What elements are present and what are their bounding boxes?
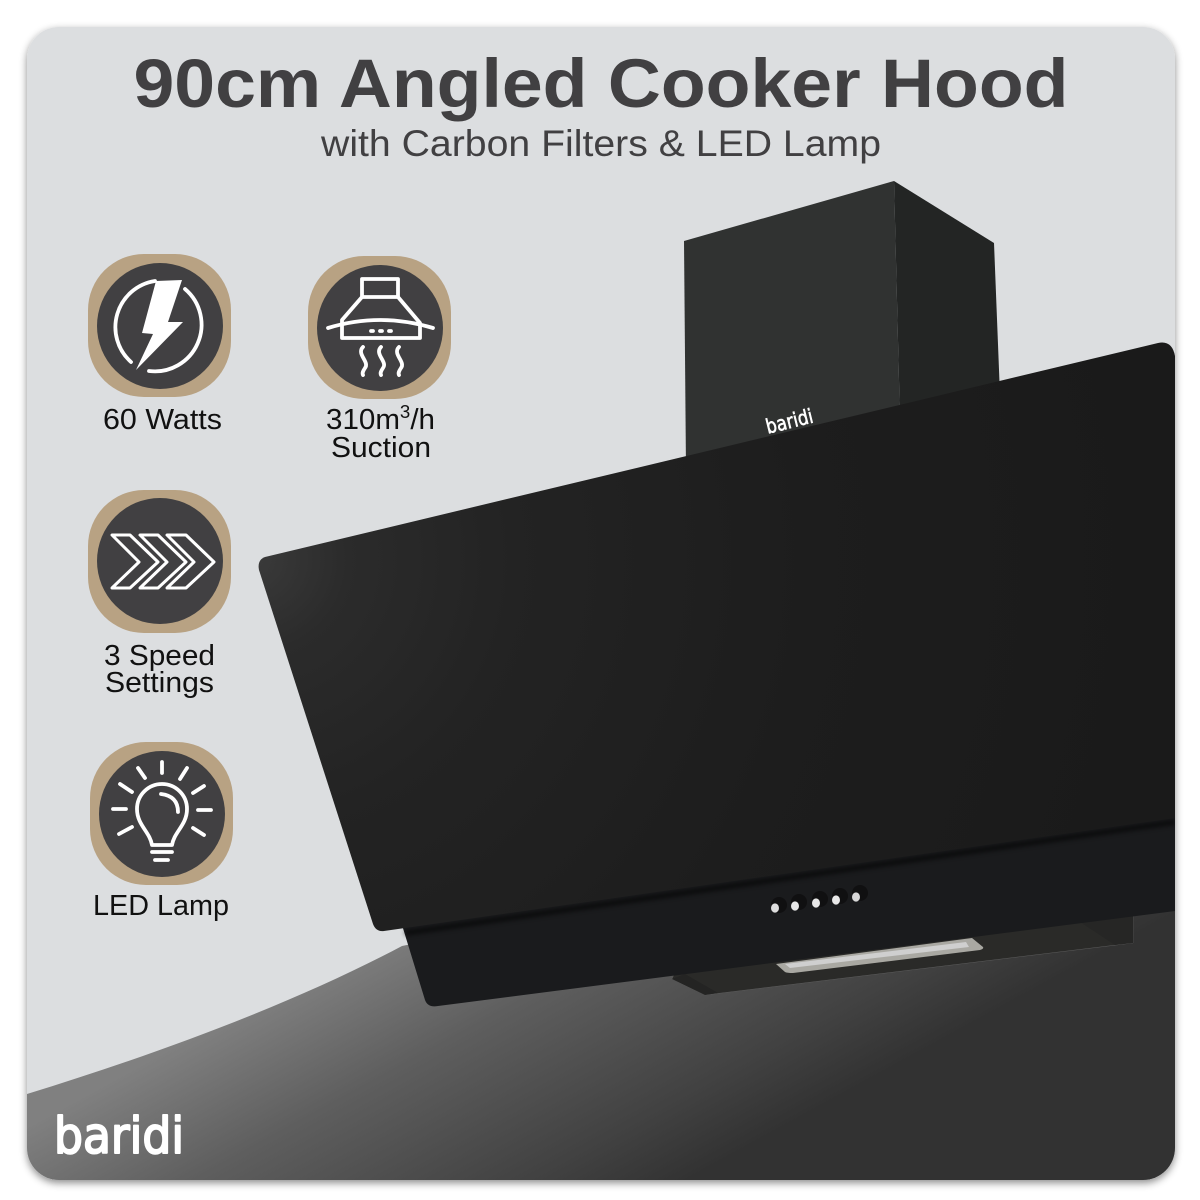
label: LED Lamp xyxy=(93,890,229,922)
feature: speed settings xyxy=(88,490,231,699)
label line 2: Suction xyxy=(331,432,431,464)
lamp xyxy=(776,938,983,973)
control panel xyxy=(402,808,1175,1006)
label: 3 xyxy=(400,402,410,422)
glass shadow on panel xyxy=(405,822,1175,933)
label: 310m xyxy=(326,404,397,436)
icon: light bulb xyxy=(90,742,233,885)
glass front panel xyxy=(259,343,1175,931)
label: 3 Speed xyxy=(104,640,215,672)
feature: LED lamp xyxy=(90,742,233,922)
duct logo: baridi xyxy=(763,404,815,439)
label: /h xyxy=(410,404,435,436)
label: 60 Watts xyxy=(103,404,222,436)
icon: chevrons xyxy=(88,490,231,633)
underside body xyxy=(672,916,1134,995)
subtitle: with Carbon Filters & LED Lamp xyxy=(320,123,881,164)
feature: 60 watts xyxy=(88,254,231,436)
brand logo: baridi xyxy=(54,1107,184,1165)
control buttons xyxy=(771,885,868,913)
label line 2: Settings xyxy=(105,667,214,699)
icon: lightning bolt xyxy=(88,254,231,397)
title: 90cm Angled Cooker Hood xyxy=(134,45,1068,122)
product: angled cooker hood xyxy=(259,181,1175,1006)
dark floor curve xyxy=(27,905,1175,1180)
icon: hood xyxy=(308,256,451,399)
feature: suction xyxy=(308,256,451,464)
chimney duct xyxy=(684,181,1000,470)
